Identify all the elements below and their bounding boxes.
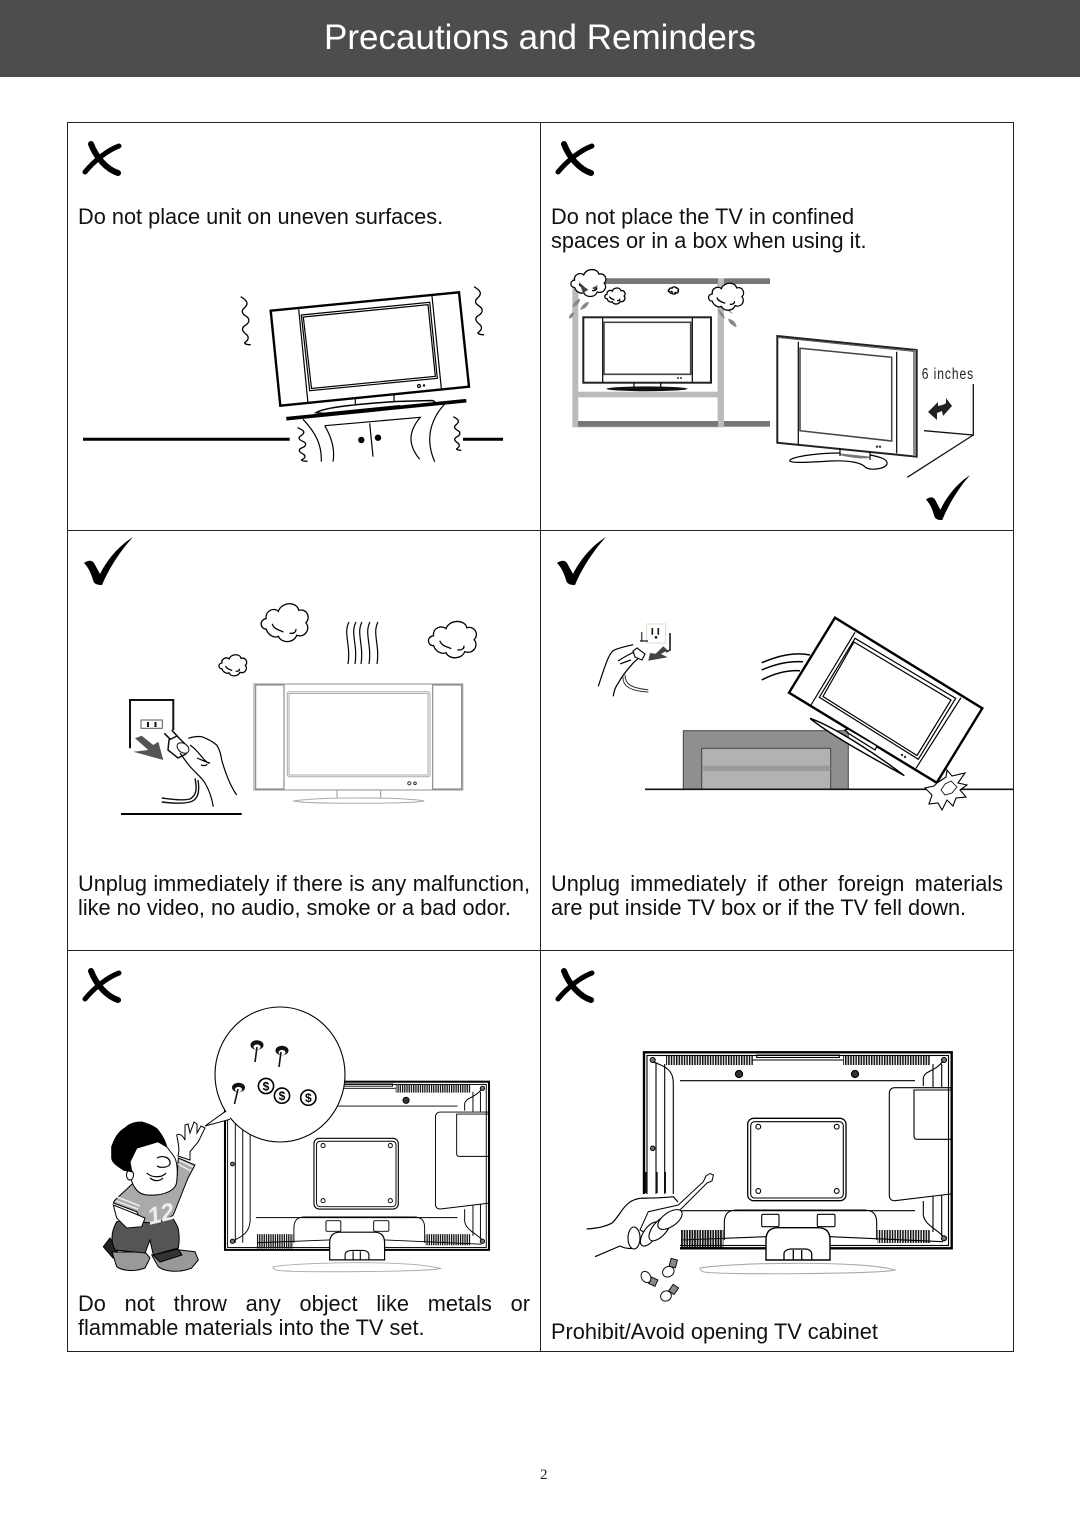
icon: cross mark	[558, 971, 592, 1000]
illustration: smoking TV	[219, 604, 476, 803]
callout: metal objects bubble: $	[279, 1089, 286, 1103]
illustration: falling TV	[762, 618, 982, 810]
illustration: TV tilting on uneven cabinet	[83, 287, 503, 462]
icon: check mark	[557, 537, 606, 585]
icon: cross mark	[558, 144, 592, 173]
panel: confined spaces	[540, 122, 1014, 531]
illustration: TV rear	[644, 1052, 952, 1274]
panel: foreign objects	[67, 950, 541, 1352]
icon: cross mark	[85, 971, 119, 1000]
caption text: Unplug immediately if other foreign materials	[551, 870, 1003, 896]
caption	[551, 204, 867, 253]
illustration: hand with screwdriver	[587, 1172, 723, 1257]
caption text: like no video, no audio, smoke or a bad odor.	[78, 895, 511, 920]
illustration: TV rear	[225, 1082, 489, 1272]
illustration: screws	[639, 1258, 679, 1303]
caption: Do not place the TV in confined	[551, 204, 854, 229]
wall corner lines	[907, 384, 973, 477]
caption: Do not throw any object like metals or	[78, 1290, 530, 1316]
callout: metal objects bubble: $	[305, 1091, 312, 1105]
panel: foreign materials	[540, 530, 1014, 951]
illustration: boy	[103, 1122, 205, 1271]
label: 6 inches: 6 inches	[922, 365, 974, 382]
jersey number: 12	[145, 1198, 178, 1231]
caption text: are put inside TV box or if the TV fell down.	[551, 895, 966, 920]
illustration: TV with clearance	[777, 336, 917, 469]
icon: check mark	[84, 537, 133, 585]
illustration: hand unplugging from outlet	[598, 624, 670, 696]
panel: malfunction	[67, 530, 541, 951]
title: Precautions and Reminders	[324, 18, 756, 57]
caption text	[551, 870, 1003, 920]
caption text: Unplug immediately if there is any malfunction,	[78, 870, 530, 896]
panel: opening cabinet	[540, 950, 1014, 1352]
page number: 2	[540, 1467, 548, 1483]
caption: flammable materials into the TV set.	[78, 1315, 425, 1340]
illustration: hand unplugging from wall	[121, 700, 242, 814]
header bar	[0, 0, 1080, 77]
caption: Do not place unit on uneven surfaces.	[78, 204, 443, 229]
caption: spaces or in a box when using it.	[551, 228, 867, 253]
callout: metal objects bubble: $	[263, 1080, 270, 1094]
caption text	[78, 870, 530, 920]
illustration: cabinet	[645, 731, 1013, 789]
illustration: TV in confined shelf	[569, 270, 770, 427]
caption: Prohibit/Avoid opening TV cabinet	[551, 1318, 878, 1344]
arrow: clearance	[928, 398, 952, 420]
icon: check mark	[926, 475, 970, 520]
caption	[78, 1290, 530, 1340]
icon: cross mark	[85, 144, 119, 173]
panel: uneven surfaces	[67, 122, 541, 531]
callout: metal objects bubble	[205, 1007, 345, 1142]
